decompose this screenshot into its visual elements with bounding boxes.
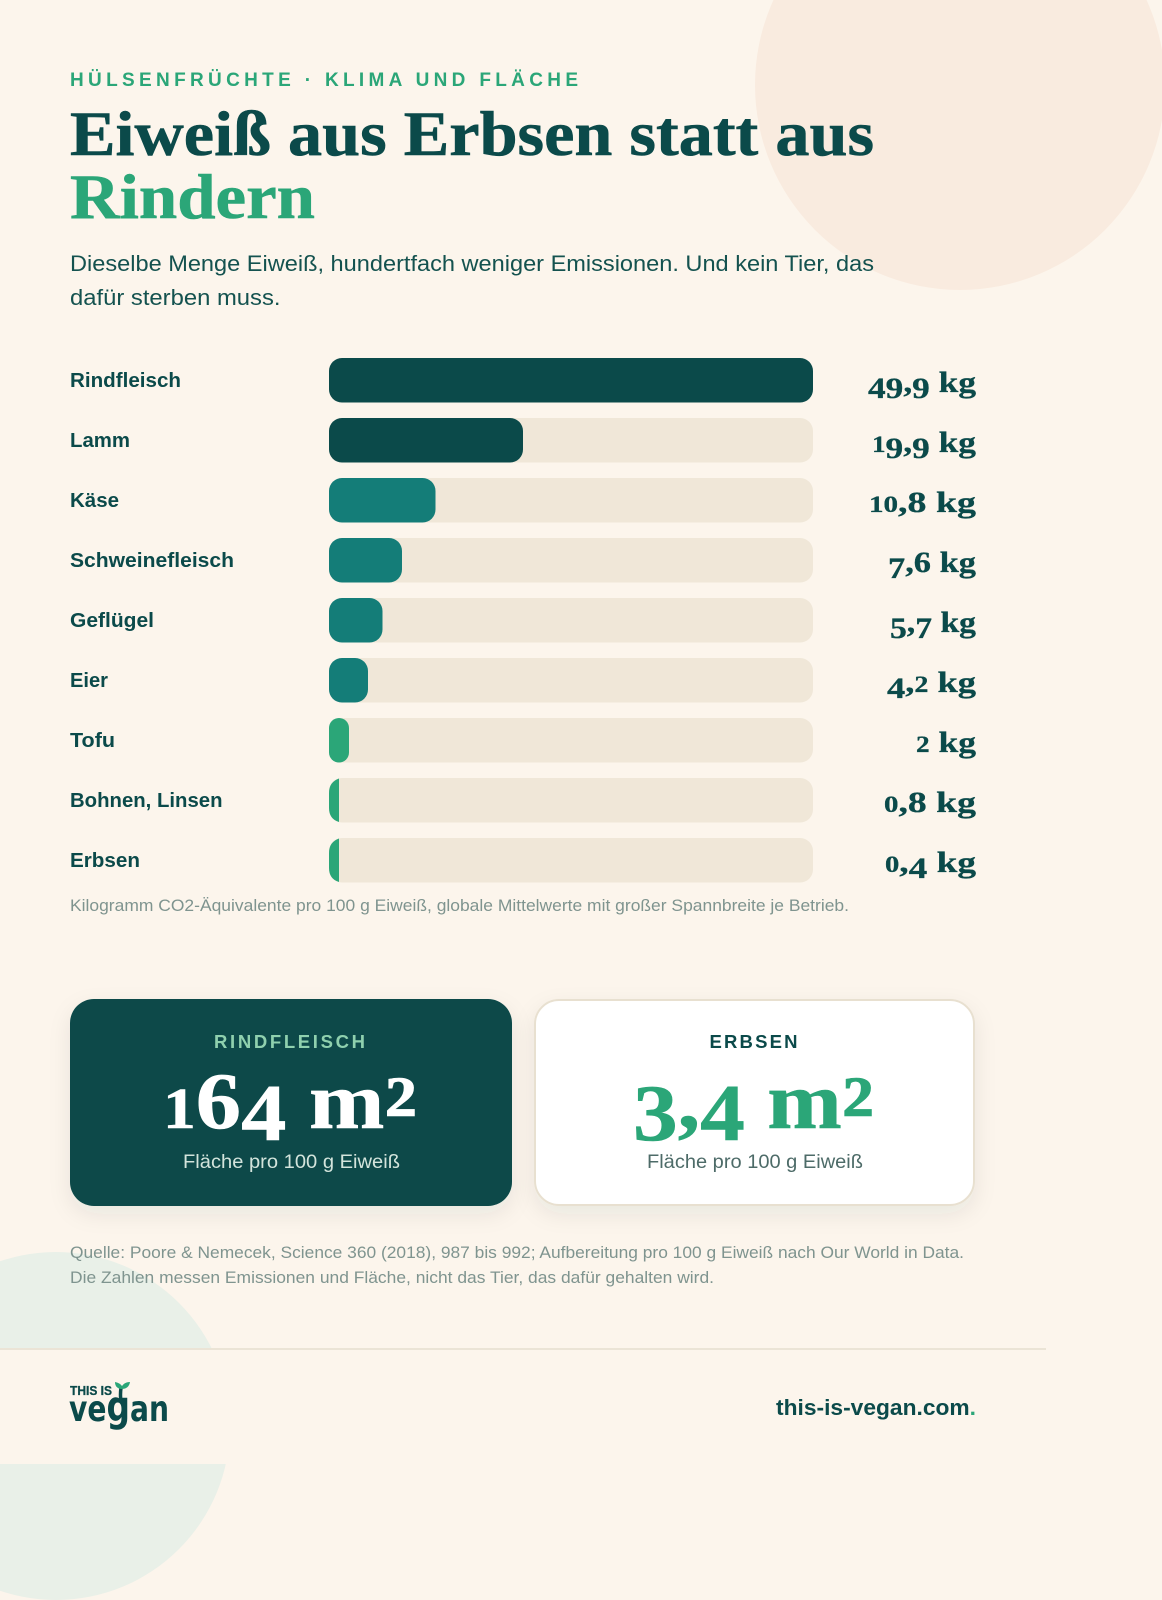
decorative circle: bottom left: [0, 1252, 230, 1600]
card: Erbsen: [535, 1000, 974, 1205]
row: Rindfleisch: Rindfleisch: [70, 370, 181, 392]
row: Schweinefleisch: 6 kg: [914, 546, 968, 579]
source note: Quelle: Poore & Nemecek, Science 360 (2018), 987 bis 992; Aufbereitung pro 100 g Eiweiß nach Our World in Data.: [70, 1244, 964, 1262]
row: Geflügel: ,: [907, 606, 915, 639]
logo: this is vegan: vegan: [69, 1382, 169, 1431]
row: Bohnen, Linsen: Bohnen, Linsen: [70, 790, 222, 812]
card: Rindfleisch: Fläche pro 100 g Eiweiß: [183, 1151, 400, 1173]
row: Lamm: ,: [903, 426, 912, 459]
card: Erbsen: 4: [700, 1070, 745, 1158]
subtitle: [70, 251, 874, 310]
row: Käse: 10,8 kg: [869, 486, 976, 519]
row: Geflügel: 7: [915, 612, 932, 645]
card: Erbsen: ,: [678, 1058, 700, 1146]
source note: [70, 1244, 964, 1287]
row: Rindfleisch: 9: [912, 372, 930, 405]
row: Schweinefleisch: 7: [888, 552, 905, 585]
row: Geflügel: kg: [932, 606, 976, 639]
row: Rindfleisch: ,: [903, 366, 912, 399]
card: Erbsen: m: [745, 1058, 842, 1146]
card: Rindfleisch: [70, 999, 512, 1206]
row: Geflügel: [70, 598, 976, 645]
row: Eier: ,: [905, 666, 914, 699]
row: Erbsen: 4: [909, 852, 927, 885]
logo: this is vegan: THIS IS: [70, 1383, 112, 1398]
row: Lamm: kg: [930, 426, 976, 459]
row: Erbsen: [70, 838, 976, 885]
footer band: [0, 1349, 1162, 1464]
decorative circle: top right: [755, 0, 1162, 290]
icon: sprout: [115, 1382, 130, 1402]
card: Rindfleisch: 16: [163, 1058, 236, 1146]
title: [70, 98, 874, 232]
eyebrow: HÜLSENFRÜCHTE · KLIMA UND FLÄCHE: [70, 70, 578, 91]
row: Schweinefleisch: [70, 538, 976, 585]
card: Erbsen: ERBSEN: [710, 1031, 798, 1052]
card: Rindfleisch: m: [286, 1058, 384, 1146]
row: Geflügel: Geflügel: [70, 610, 154, 632]
title: Eiweiß aus Erbsen statt aus: [70, 98, 874, 169]
row: Lamm: 9: [912, 432, 930, 465]
row: Geflügel: 5: [890, 612, 907, 645]
row: Lamm: 9: [886, 432, 903, 465]
title: Rindern: [70, 161, 315, 232]
card: Rindfleisch: RINDFLEISCH: [214, 1031, 365, 1052]
row: Tofu: [70, 718, 976, 762]
row: Käse: [70, 478, 976, 522]
website: this-is-vegan.com .: [776, 1395, 976, 1420]
bar chart: CO2 per 100 g protein: [70, 358, 976, 885]
row: Rindfleisch: 49: [868, 372, 903, 405]
row: Schweinefleisch: Schweinefleisch: [70, 550, 234, 572]
row: Eier: 2 kg: [914, 666, 968, 699]
chart footnote: Kilogramm CO2-Äquivalente pro 100 g Eiweiß, globale Mittelwerte mit großer Spannbreite je Betrieb.: [70, 897, 849, 915]
row: Eier: 4: [887, 672, 905, 705]
row: Bohnen, Linsen: [70, 778, 976, 822]
row: Käse: Käse: [70, 490, 119, 512]
row: Erbsen: 0,: [885, 846, 907, 879]
row: Tofu: 2 kg: [916, 726, 976, 759]
card: Erbsen: 3: [633, 1070, 678, 1158]
row: Tofu: Tofu: [70, 730, 115, 752]
row: Rindfleisch: kg: [930, 366, 976, 399]
card: Rindfleisch: 4: [241, 1070, 286, 1158]
row: Schweinefleisch: ,: [905, 546, 914, 579]
row: Eier: [70, 658, 976, 705]
card: Erbsen: Fläche pro 100 g Eiweiß: [647, 1151, 863, 1173]
source note: Die Zahlen messen Emissionen und Fläche, nicht das Tier, das dafür gehalten wird.: [70, 1269, 714, 1287]
row: Bohnen, Linsen: 0,8 kg: [884, 786, 976, 819]
row: Lamm: 1: [872, 432, 886, 457]
row: Eier: Eier: [70, 670, 108, 692]
card: Rindfleisch: ²: [384, 1055, 417, 1162]
row: Erbsen: kg: [927, 846, 976, 879]
row: Lamm: Lamm: [70, 430, 130, 452]
row: Lamm: [70, 418, 976, 465]
card: Erbsen: ²: [842, 1055, 874, 1162]
row: Rindfleisch: [70, 358, 976, 405]
subtitle: dafür sterben muss.: [70, 285, 280, 310]
subtitle: Dieselbe Menge Eiweiß, hundertfach weniger Emissionen. Und kein Tier, das: [70, 251, 874, 276]
footer divider: [0, 1348, 1046, 1350]
row: Erbsen: Erbsen: [70, 850, 140, 872]
